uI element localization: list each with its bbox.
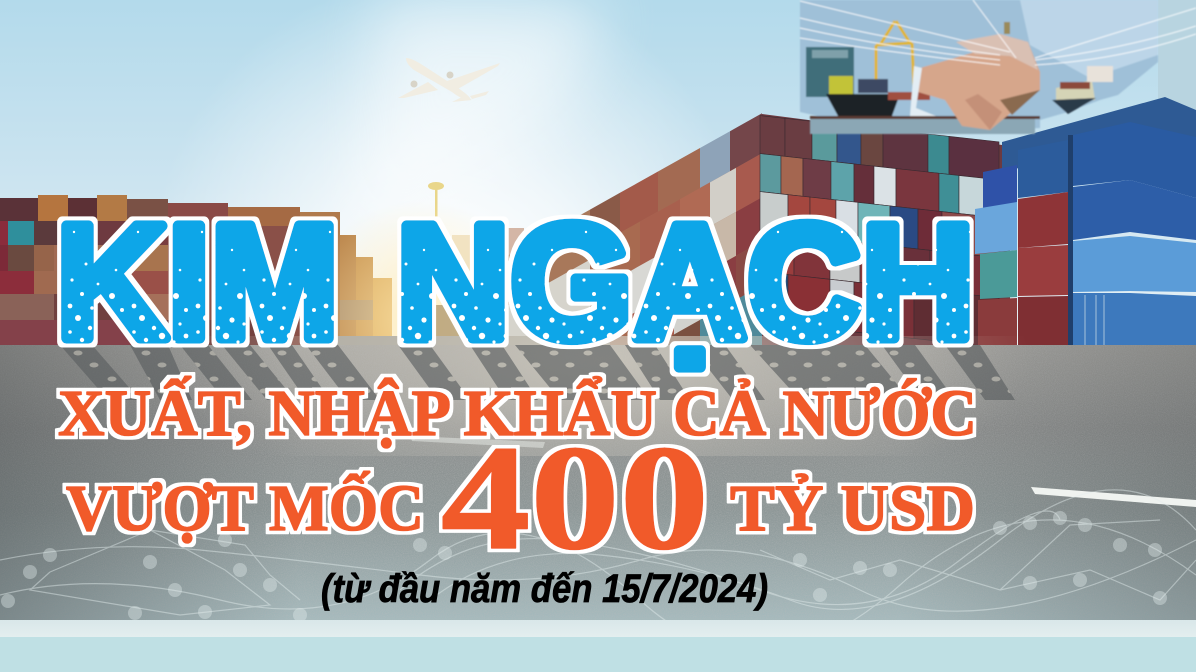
left container stack bbox=[0, 195, 392, 346]
panel: handshake and port collage bbox=[800, 0, 1196, 134]
heading: KIM NGẠCH: NGẠCH bbox=[396, 190, 975, 373]
letter shadows on road bbox=[60, 345, 1015, 400]
big number: 400: 400 bbox=[441, 415, 709, 581]
bottom band bbox=[0, 620, 1196, 672]
heading: XUẤT, NHẬP KHẨU CẢ NƯỚC: XUẤT, NHẬP KHẨU CẢ NƯỚC bbox=[58, 376, 977, 450]
background: sky bbox=[0, 0, 1196, 372]
date note: (từ đầu năm đến 15/7/2024) bbox=[321, 567, 768, 611]
network pattern overlay bbox=[0, 490, 1196, 651]
far buildings bbox=[425, 228, 524, 343]
icon: handshake bbox=[910, 34, 1040, 130]
central container stack: left face bbox=[505, 113, 762, 489]
heading: TỶ USD: TỶ USD bbox=[730, 472, 975, 545]
distant sunlit yard glow bbox=[300, 200, 540, 346]
icon: airplane bbox=[398, 58, 500, 102]
road markings bbox=[410, 436, 1196, 507]
heading: VƯỢT MỐC: VƯỢT MỐC bbox=[66, 471, 424, 545]
central container stack: right face bbox=[760, 114, 1010, 348]
heading: KIM NGẠCH: KIM bbox=[56, 190, 339, 373]
road surface bbox=[0, 336, 1196, 620]
icon: light tower bbox=[428, 182, 444, 248]
heading: KIM NGẠCH bbox=[56, 190, 975, 373]
blue container stacks bbox=[975, 97, 1196, 348]
